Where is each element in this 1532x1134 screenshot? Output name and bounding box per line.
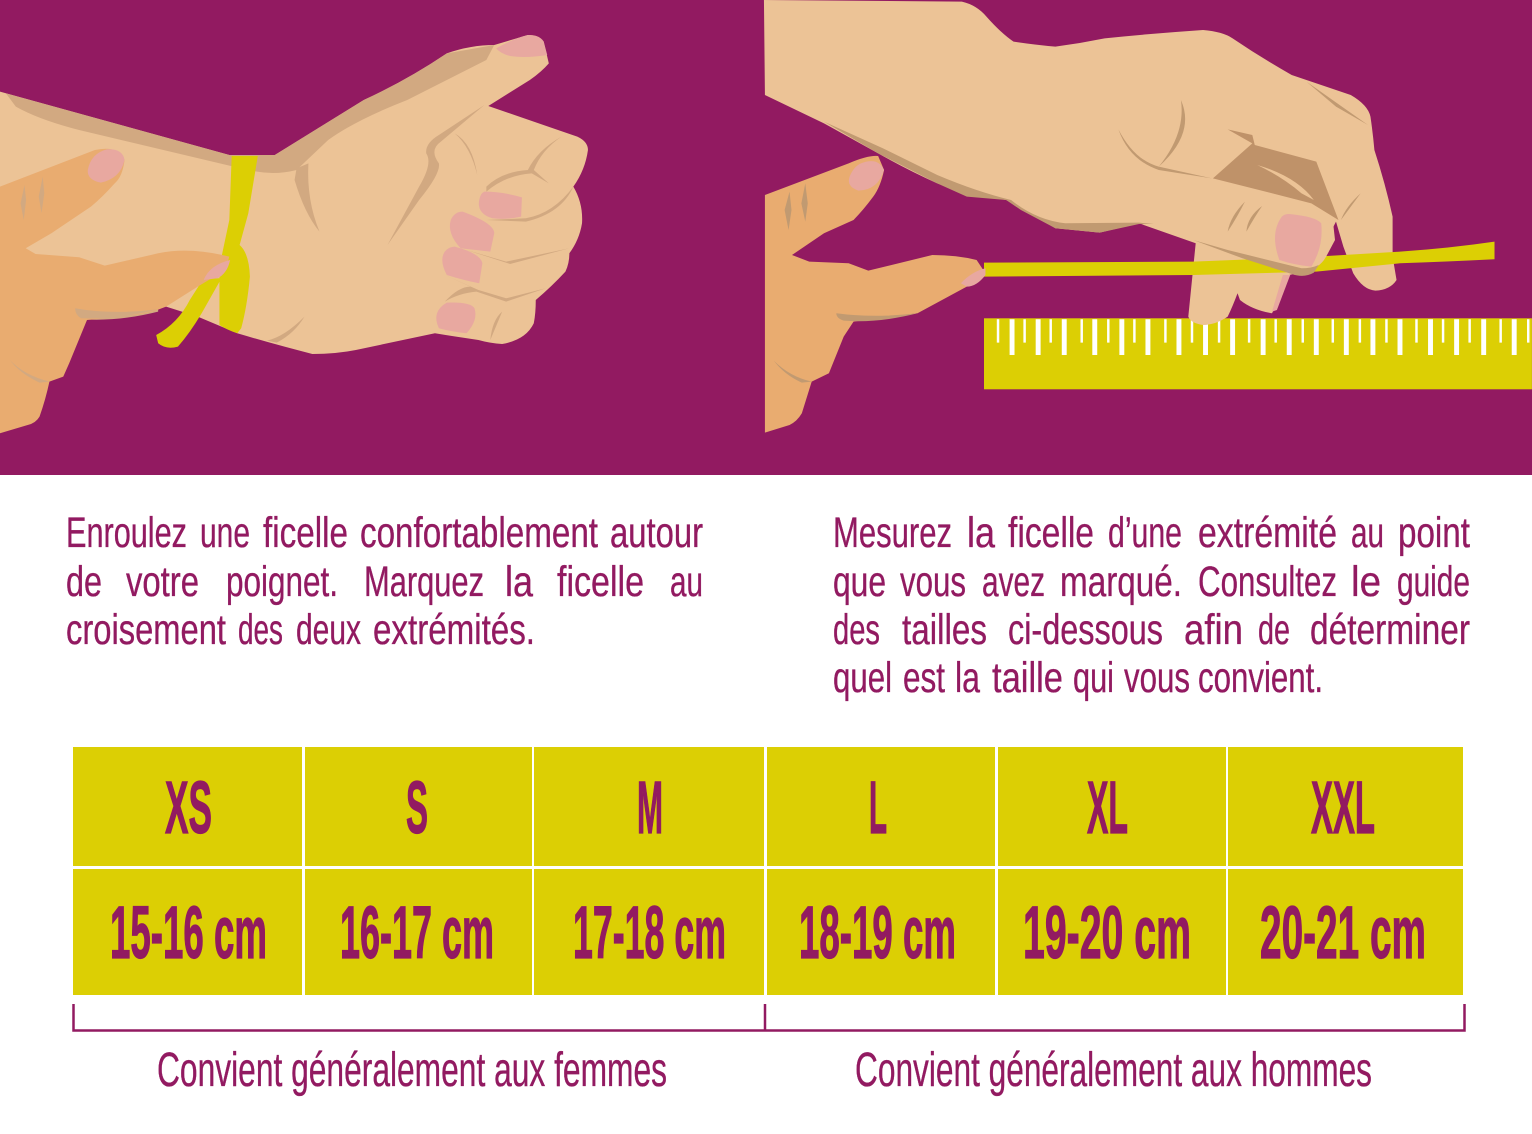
size M: 17-18 cm xyxy=(573,891,726,974)
instruction text: wrap the string: Marquez xyxy=(364,558,484,606)
instruction text: wrap the string: une xyxy=(200,509,250,557)
instruction text: measure the string: Mesurez xyxy=(833,509,952,557)
instruction text: measure the string: la xyxy=(967,509,995,557)
size M: M xyxy=(637,766,663,849)
yellow string xyxy=(984,242,1495,277)
size XXL: XXL xyxy=(1311,766,1375,849)
instruction text: wrap the string: ficelle xyxy=(263,509,348,557)
instruction text: wrap the string: confortablement xyxy=(360,509,598,557)
instruction text: wrap the string: poignet. xyxy=(226,558,338,606)
size XS xyxy=(73,747,302,995)
instruction text: measure the string: qui xyxy=(1073,654,1114,702)
size M xyxy=(534,747,764,995)
nail of hidden finger xyxy=(1272,275,1290,312)
size L: L xyxy=(869,766,887,849)
instruction text: measure the string: taille xyxy=(992,654,1063,702)
instruction text: measure the string: au xyxy=(1351,509,1384,557)
size XXL xyxy=(1228,747,1463,995)
instruction text: measure the string: ci-dessous xyxy=(1008,606,1163,654)
illustration: string wrapped around wrist xyxy=(0,35,588,433)
instruction text: wrap the string: Enroulez xyxy=(66,509,187,557)
instruction text: measure the string: afin xyxy=(1184,606,1243,654)
helper hand details xyxy=(774,183,918,383)
size L: 18-19 cm xyxy=(799,891,956,974)
size S: S xyxy=(406,766,428,849)
instruction text: measure the string: vous xyxy=(900,558,966,606)
instruction text: wrap the string: croisement xyxy=(66,606,226,654)
instruction text: measure the string: point xyxy=(1398,509,1470,557)
instruction text: measure the string: ficelle xyxy=(1008,509,1094,557)
instruction text: wrap the string: deux xyxy=(296,606,361,654)
instruction text: wrap the string: au xyxy=(670,558,703,606)
label: women: Convient généralement aux femmes xyxy=(157,1044,667,1097)
instruction text: wrap the string: extrémités. xyxy=(373,606,535,654)
wrist and thumb shadow xyxy=(6,45,494,173)
instruction text: measure the string: convient. xyxy=(1198,654,1323,702)
knuckle creases xyxy=(1118,82,1368,232)
hand with raised thumb xyxy=(0,35,588,354)
instruction text: measure the string: le xyxy=(1351,558,1381,606)
instruction text: wrap the string: ficelle xyxy=(557,558,644,606)
instruction text: measure the string: extrémité xyxy=(1198,509,1337,557)
instruction text: measure the string: vous xyxy=(1124,654,1190,702)
instruction text: measure the string: avez xyxy=(982,558,1045,606)
helper finger creases xyxy=(10,177,158,383)
helping hand fingers xyxy=(0,149,229,433)
instruction text: measure the string: la xyxy=(955,654,980,702)
hand creases xyxy=(75,105,573,343)
size L xyxy=(767,747,995,995)
instruction text: measure the string: que xyxy=(833,558,886,606)
instruction text: wrap the string: autour xyxy=(610,509,703,557)
instruction text: wrap the string: la xyxy=(505,558,533,606)
size XL: 19-20 cm xyxy=(1023,891,1191,974)
illustration: measuring string against ruler xyxy=(764,0,1532,433)
bracket: women and men ranges xyxy=(74,1004,1464,1030)
instruction text: measure the string: est xyxy=(903,654,945,702)
size XL: XL xyxy=(1087,766,1128,849)
instruction text: wrap the string: votre xyxy=(126,558,199,606)
size S: 16-17 cm xyxy=(340,891,494,974)
size table xyxy=(73,747,1463,995)
instruction text: measure the string: quel xyxy=(833,654,892,702)
instruction text: measure the string: guide xyxy=(1397,558,1470,606)
instruction text: wrap the string xyxy=(66,509,703,654)
instruction text: measure the string: d’une xyxy=(1108,509,1182,557)
size XS: XS xyxy=(165,766,212,849)
thumb xyxy=(1149,180,1335,272)
panel: purple banner xyxy=(0,0,1532,475)
thumb nail xyxy=(1275,214,1322,267)
instruction text: measure the string: marqué. xyxy=(1060,558,1182,606)
hand underside shadow xyxy=(824,122,1154,233)
instruction text: measure the string: tailles xyxy=(902,606,987,654)
size XL xyxy=(998,747,1226,995)
instruction text: measure the string: Consultez xyxy=(1198,558,1337,606)
pinching hand back and fingers xyxy=(764,0,1397,325)
thumb shadow line xyxy=(1193,240,1319,276)
ruler xyxy=(984,318,1532,389)
inner light gap xyxy=(1257,165,1314,200)
helper hand xyxy=(765,156,985,433)
instruction text: wrap the string: des xyxy=(238,606,283,654)
fingernails xyxy=(88,35,547,333)
instruction text: measure the string: déterminer xyxy=(1310,606,1470,654)
helper nails xyxy=(849,161,985,287)
crease and shadow between fingers xyxy=(1213,129,1338,220)
instruction text: measure the string: de xyxy=(1258,606,1290,654)
size XS: 15-16 cm xyxy=(110,891,267,974)
instruction text: wrap the string: de xyxy=(66,558,102,606)
instruction text: measure the string xyxy=(833,509,1470,702)
yellow string loop xyxy=(156,156,258,348)
size S xyxy=(305,747,532,995)
instruction text: measure the string: des xyxy=(833,606,880,654)
